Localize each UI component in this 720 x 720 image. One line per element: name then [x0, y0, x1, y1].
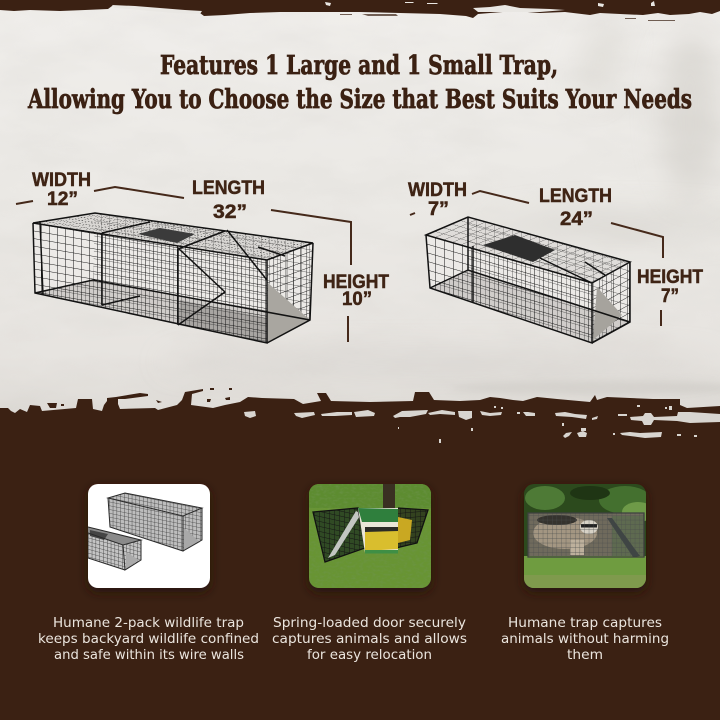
caption: humane 2-pack: and safe within its wire walls: [54, 647, 244, 663]
tree trunk: [383, 484, 395, 510]
icon: small trap door plate: [593, 287, 622, 340]
caption: spring-loaded door: captures animals and allows: [272, 631, 467, 647]
caption: spring-loaded door: [272, 615, 467, 663]
caption: spring-loaded door: for easy relocation: [307, 647, 432, 663]
large trap illustration: [33, 213, 313, 343]
card shadows: [88, 488, 646, 592]
small trap dimensions: HEIGHT: [637, 267, 703, 288]
caption: humane 2-pack: Humane 2-pack wildlife trap: [53, 615, 244, 631]
small trap dimensions: WIDTH: [408, 180, 467, 201]
icon: large trap top handle plate: [138, 228, 195, 243]
large trap dimensions: [16, 170, 389, 342]
large trap dimensions: HEIGHT: [323, 272, 389, 293]
caption: humane trap: Humane trap captures: [508, 615, 662, 631]
caption: humane 2-pack: [38, 615, 259, 663]
small trap dimensions: LENGTH: [539, 186, 612, 207]
torn top edge: [0, 0, 720, 21]
caption: humane trap: animals without harming: [501, 631, 669, 647]
large trap dimensions: 32”: [213, 202, 247, 223]
large trap dimensions: WIDTH: [32, 170, 91, 191]
caption: humane trap: [501, 615, 669, 663]
large trap dimensions: 10”: [342, 289, 372, 310]
small dark flecks on paper: [47, 388, 232, 408]
caption: humane 2-pack: keeps backyard wildlife confined: [38, 631, 259, 647]
photo card: raccoon in trap: [524, 484, 654, 588]
heading: Features 1 Large and 1 Small Trap,: [160, 50, 558, 81]
small trap dimensions: 7”: [428, 199, 449, 220]
paper showing through the brown: [244, 405, 720, 443]
small trap dimensions: 7”: [661, 286, 679, 307]
heading: [27, 50, 692, 115]
large trap dimensions: LENGTH: [192, 178, 265, 199]
bottom brown panel with torn edge: [0, 388, 720, 720]
small trap illustration: [426, 217, 630, 343]
paper background: [0, 0, 720, 445]
icon: small trap top handle plate: [483, 235, 555, 262]
photo card: two traps on white: [88, 484, 210, 588]
icon: large trap door plate: [267, 283, 310, 342]
small trap dimensions: 24”: [560, 209, 593, 230]
caption: spring-loaded door: Spring-loaded door securely: [273, 615, 466, 631]
small trap dimensions: [408, 180, 703, 326]
large trap dimensions: 12”: [47, 189, 78, 210]
caption: humane trap: them: [567, 647, 603, 663]
product box: [358, 508, 398, 553]
photo card: trap with box on lawn: [309, 484, 431, 588]
raccoon: [533, 517, 597, 549]
